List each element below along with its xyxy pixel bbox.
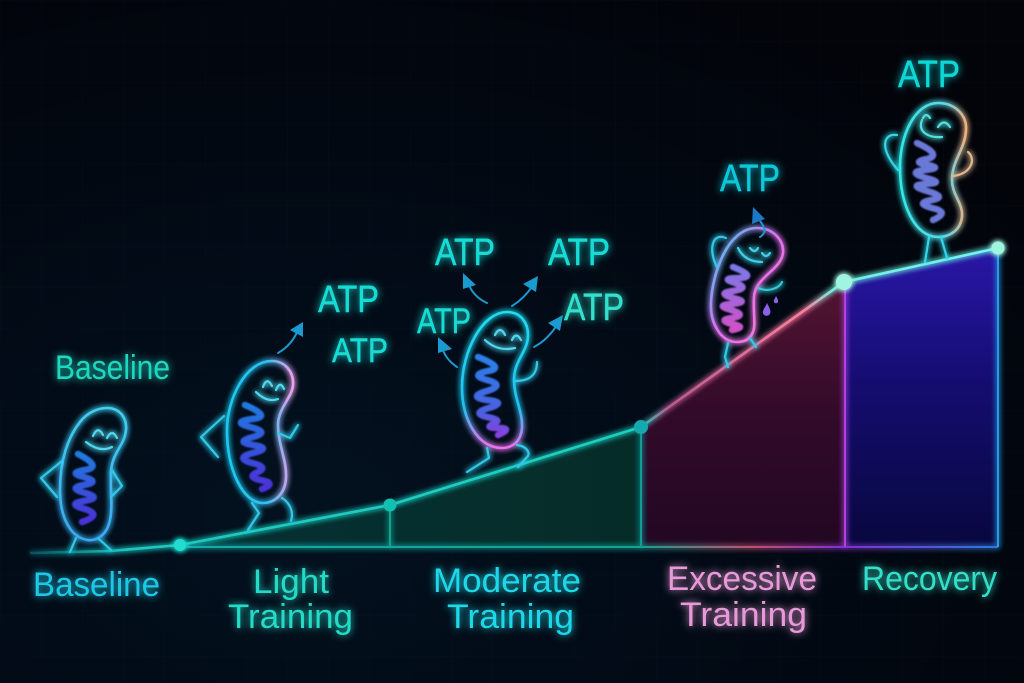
body and limbs <box>41 408 126 552</box>
label: moderate training: Training <box>447 598 574 636</box>
cristae <box>477 357 506 435</box>
label: baseline: Baseline <box>33 566 160 604</box>
area: recovery <box>844 248 998 547</box>
ATP labels <box>318 54 960 370</box>
heading: baseline tag: Baseline <box>55 349 170 387</box>
ATP: recovery: ATP <box>898 54 960 96</box>
label: light training: Training <box>228 598 353 636</box>
area chart <box>30 242 1004 553</box>
arrow: moderate upper left <box>463 273 487 303</box>
ATP: moderate upper right: ATP <box>548 232 610 274</box>
mitochondrion: excessive training <box>711 228 783 367</box>
arrows <box>278 207 765 367</box>
label: recovery: Recovery <box>862 560 997 598</box>
label: light training: Light <box>253 563 330 601</box>
label: moderate training: Moderate <box>433 562 581 600</box>
stage labels <box>33 560 997 636</box>
arrow: excessive training <box>752 207 765 237</box>
ATP: moderate upper left: ATP <box>435 232 495 274</box>
arrow: moderate right <box>534 315 563 347</box>
area: light and moderate training <box>180 427 641 547</box>
body and limbs <box>711 228 783 367</box>
ATP: light training upper: ATP <box>318 279 379 321</box>
ATP: moderate right: ATP <box>564 287 624 329</box>
mitochondrion: light training <box>201 361 298 530</box>
mitochondrion: moderate training <box>462 312 537 472</box>
arrow: moderate upper right <box>512 276 538 306</box>
mitochondrion: recovery <box>885 103 972 262</box>
ATP: light training lower: ATP <box>332 332 388 370</box>
mitochondrion: baseline <box>41 408 126 552</box>
cristae <box>916 143 942 220</box>
cristae <box>75 454 94 522</box>
chart axes and stage dividers <box>180 248 998 547</box>
cristae <box>723 267 747 330</box>
arrow: light training <box>278 322 303 353</box>
area: excessive training <box>641 282 844 547</box>
label: excessive training: Training <box>680 596 807 634</box>
growth curve <box>30 248 998 553</box>
sweat drops <box>763 296 778 316</box>
stage markers <box>174 242 1004 551</box>
label: excessive training: Excessive <box>667 560 817 598</box>
arrow: moderate left <box>438 337 457 367</box>
body and limbs <box>885 103 972 262</box>
ATP: excessive training: ATP <box>720 158 780 200</box>
body and limbs <box>201 361 298 530</box>
body and limbs <box>462 312 537 472</box>
cristae <box>241 405 270 489</box>
ATP: moderate left: ATP <box>417 302 471 341</box>
